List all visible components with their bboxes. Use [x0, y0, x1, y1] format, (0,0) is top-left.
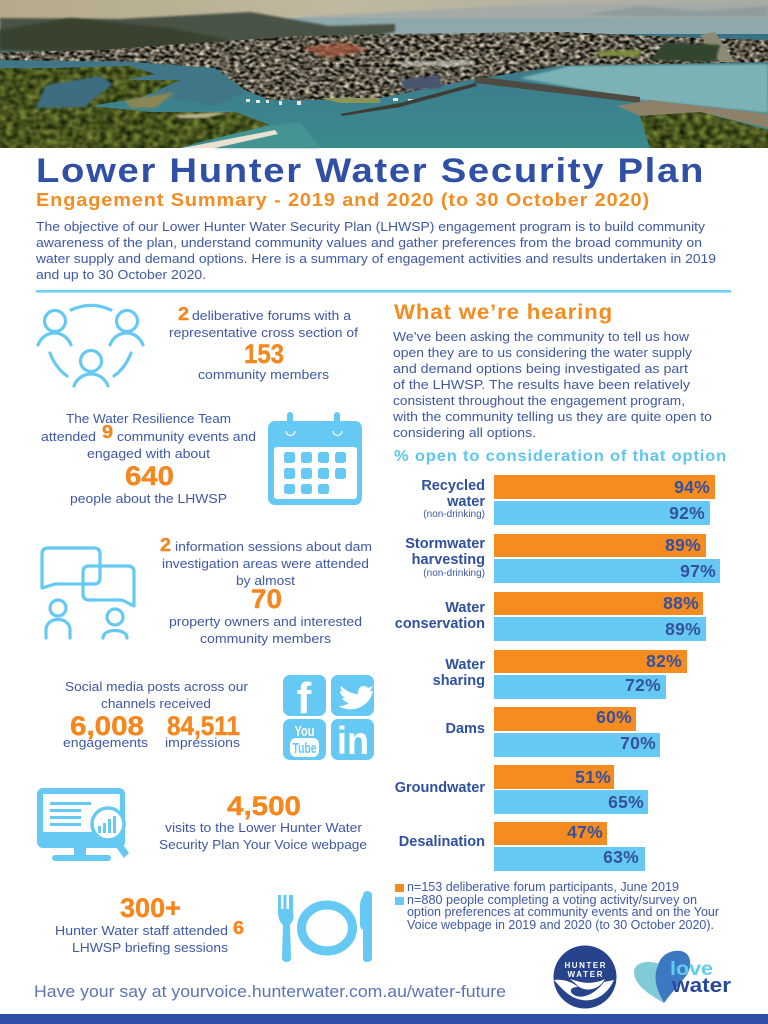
hearing paragraph: consistent throughout the engagement program, [393, 393, 685, 408]
row: groundwater: 51% [575, 767, 611, 787]
row: groundwater: 65% [608, 792, 644, 812]
call to action link: Have your say at yourvoice.hunterwater.com.au/water-future [34, 982, 506, 1001]
information sessions text: investigation areas were attended [162, 556, 369, 571]
row: water sharing: 72% [625, 675, 661, 695]
row: water sharing: sharing [433, 673, 485, 689]
forums text: 153 [244, 339, 284, 369]
logo: Hunter Water [554, 946, 616, 1008]
panel: deliberative forums [38, 304, 358, 386]
row: stormwater harvesting: 97% [680, 561, 716, 581]
icon: social media logos: Tube [292, 740, 316, 757]
information sessions text: community members [200, 631, 332, 646]
community events text: 9 [102, 422, 113, 442]
community events text: people about the LHWSP [70, 491, 227, 506]
community events text: 640 [125, 461, 174, 491]
webpage visits text: Security Plan Your Voice webpage [159, 837, 367, 852]
icon: monitor with magnifier [37, 788, 129, 861]
social media text: engagements [63, 735, 149, 750]
social media text [63, 679, 249, 750]
row: recycled water: water [446, 494, 485, 510]
row: water conservation: 88% [663, 593, 699, 613]
row: water conservation: conservation [395, 616, 485, 632]
row: desalination: 47% [567, 822, 603, 842]
community events text: The Water Resilience Team [66, 411, 231, 426]
intro paragraph: awareness of the plan, understand community values and gather preferences from the broad community on [36, 235, 702, 250]
row: water conservation [395, 592, 706, 641]
title: Lower Hunter Water Security Plan [36, 152, 705, 190]
logo: Love Water: water [671, 975, 731, 997]
row: dams: 60% [596, 707, 632, 727]
icon: calendar [268, 412, 362, 505]
logo: Hunter Water: HUNTER [564, 961, 606, 970]
hearing paragraph: and demand options being investigated as part [393, 361, 688, 376]
logo: Hunter Water: WATER [568, 970, 603, 979]
hearing paragraph: of the LHWSP. The results have been relatively [393, 377, 691, 392]
row: recycled water: 94% [674, 477, 710, 497]
row: recycled water [421, 475, 715, 525]
information sessions text: 2 [160, 535, 171, 555]
icon: group of three people [38, 306, 143, 386]
webpage visits text [159, 791, 367, 852]
bar chart: percent open to each option [395, 475, 720, 871]
social media text: impressions [165, 735, 241, 750]
subtitle: Engagement Summary - 2019 and 2020 (to 30 October 2020) [36, 190, 650, 210]
row: stormwater harvesting: (non-drinking) [423, 568, 485, 579]
icon: social media logos [283, 674, 374, 763]
social media text: Social media posts across our [65, 679, 249, 694]
social media text: 84,511 [167, 711, 240, 741]
panel: staff briefings [55, 891, 372, 962]
intro paragraph: The objective of our Lower Hunter Water Security Plan (LHWSP) engagement program is to build community [36, 219, 706, 234]
staff briefings text: LHWSP briefing sessions [72, 940, 229, 955]
row: water sharing: Water [445, 657, 485, 673]
row: stormwater harvesting: 89% [665, 535, 701, 555]
row: desalination: 63% [603, 847, 639, 867]
row: dams: Dams [446, 721, 485, 737]
information sessions text [160, 535, 372, 646]
information sessions text: information sessions about dam [175, 539, 372, 554]
information sessions text: 70 [251, 584, 282, 614]
intro paragraph: water supply and demand options. Here is a summary of engagement activities and results undertaken in 2019 [35, 251, 716, 266]
staff briefings text [55, 893, 244, 955]
row: stormwater harvesting: Stormwater [405, 536, 485, 552]
community events text: engaged with about [87, 446, 210, 461]
community events text: community events and [117, 429, 256, 444]
photo: aerial view of coastal town and estuary [0, 0, 768, 150]
logo: Love Water [634, 951, 731, 1003]
footer bar [0, 1014, 768, 1024]
chart legend: n=153 deliberative forum participants, June 2019 [407, 880, 679, 894]
intro paragraph [35, 219, 716, 282]
staff briefings text: Hunter Water staff attended [55, 923, 228, 938]
row: stormwater harvesting [405, 534, 720, 583]
forums text: 2 [178, 304, 189, 324]
webpage visits text: visits to the Lower Hunter Water [165, 820, 363, 835]
icon: plate and cutlery [278, 891, 372, 962]
row: dams [446, 707, 660, 757]
heading: what we're hearing: What we’re hearing [394, 301, 613, 324]
forums text [169, 304, 358, 382]
icon: social media logos: You [294, 723, 314, 740]
chart legend [395, 880, 719, 932]
panel: webpage visits [37, 788, 367, 861]
information sessions text: property owners and interested [169, 614, 362, 629]
social media text: channels received [101, 696, 211, 711]
row: groundwater: Groundwater [395, 780, 485, 796]
row: dams: 70% [620, 733, 656, 753]
forums text: deliberative forums with a [192, 308, 352, 323]
staff briefings text: 300+ [120, 893, 181, 923]
row: groundwater [395, 765, 648, 814]
social media text: 6,008 [70, 711, 144, 741]
icon: speech bubbles and people [42, 548, 134, 638]
row: recycled water: Recycled [421, 478, 485, 494]
chart legend: option preferences at community events and on the Your [407, 905, 719, 919]
information sessions text: by almost [236, 573, 295, 588]
row: water sharing: 82% [646, 651, 682, 671]
community events text: attended [41, 429, 96, 444]
webpage visits text: 4,500 [227, 791, 301, 821]
icon: social media logos: f [297, 674, 312, 723]
panel: social media [63, 674, 374, 763]
icon: social media logos: in [337, 720, 369, 763]
hearing paragraph [392, 329, 712, 440]
hearing paragraph: We’ve been asking the community to tell us how [393, 329, 690, 344]
row: water conservation: 89% [665, 619, 701, 639]
forums text: representative cross section of [169, 325, 358, 340]
row: water conservation: Water [445, 600, 485, 616]
panel: information sessions [42, 535, 372, 646]
row: recycled water: (non-drinking) [423, 509, 485, 520]
hearing paragraph: open they are to us considering the water supply [393, 345, 693, 360]
hearing paragraph: considering all options. [393, 425, 536, 440]
row: stormwater harvesting: harvesting [412, 552, 485, 568]
chart legend: Voice webpage in 2019 and 2020 (to 30 October 2020). [407, 918, 714, 932]
panel: community events [41, 411, 362, 506]
logo: Love Water: love [670, 959, 713, 980]
row: desalination: Desalination [399, 834, 485, 850]
forums text: community members [198, 367, 330, 382]
row: recycled water: 92% [669, 503, 705, 523]
community events text [41, 411, 256, 506]
intro paragraph: and up to 30 October 2020. [36, 267, 206, 282]
row: water sharing [433, 650, 687, 699]
row: desalination [399, 822, 645, 871]
chart legend: n=880 people completing a voting activity/survey on [407, 893, 697, 907]
hearing paragraph: with the community telling us they are quite open to [392, 409, 712, 424]
staff briefings text: 6 [233, 918, 244, 938]
chart heading: % open to consideration of that option [394, 448, 727, 465]
